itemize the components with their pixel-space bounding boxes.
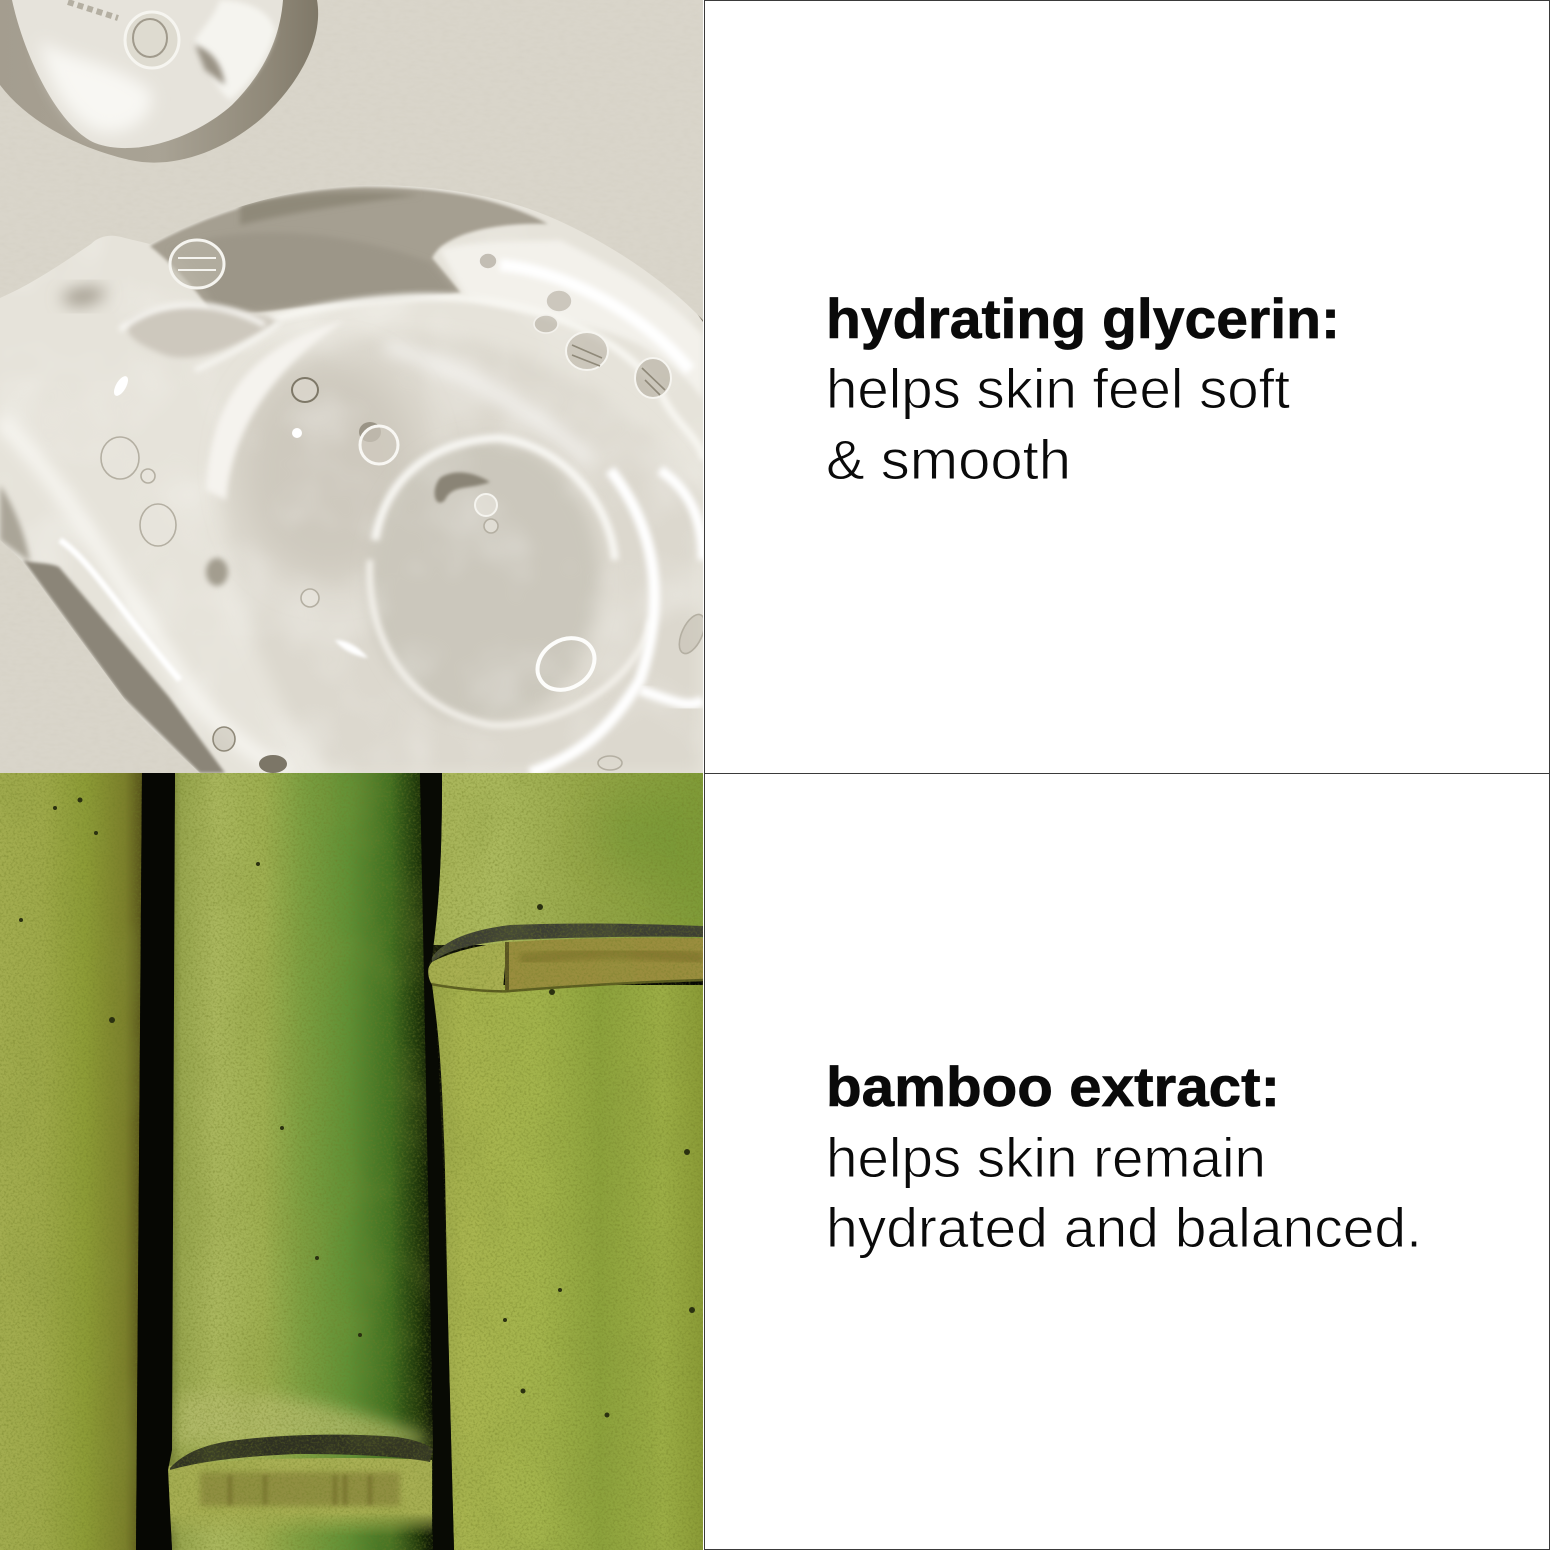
bamboo stalk left bbox=[0, 773, 142, 1550]
bright highlight bbox=[440, 240, 703, 400]
inner gel pool bbox=[224, 335, 700, 773]
dark upper band bbox=[150, 187, 548, 318]
panel: bamboo photo bbox=[0, 773, 703, 1550]
bamboo stalk right bbox=[428, 773, 703, 1550]
panel: text frames bbox=[704, 0, 1550, 1550]
glycerin droplet top bbox=[0, 0, 318, 163]
left dark edge bbox=[0, 485, 30, 562]
text block: hydrating glycerin bbox=[826, 287, 1340, 491]
description: and smooth: & smooth bbox=[826, 428, 1071, 491]
description: helps skin feel soft: helps skin feel soft bbox=[826, 357, 1290, 420]
panel: glycerin photo bbox=[0, 0, 710, 780]
text block: bamboo extract bbox=[826, 1055, 1422, 1259]
heading: hydrating glycerin: hydrating glycerin: bbox=[826, 287, 1340, 350]
heading: bamboo extract: bamboo extract: bbox=[826, 1055, 1280, 1118]
description: hydrated and balanced: hydrated and balanced. bbox=[826, 1196, 1422, 1259]
description: helps skin remain: helps skin remain bbox=[826, 1126, 1266, 1189]
bamboo stalk centre bbox=[168, 773, 433, 1550]
rim dark crescent bbox=[698, 314, 703, 322]
bubbles bbox=[101, 240, 710, 770]
glycerin gel body bbox=[0, 180, 705, 780]
bamboo surface spots bbox=[19, 798, 695, 1418]
